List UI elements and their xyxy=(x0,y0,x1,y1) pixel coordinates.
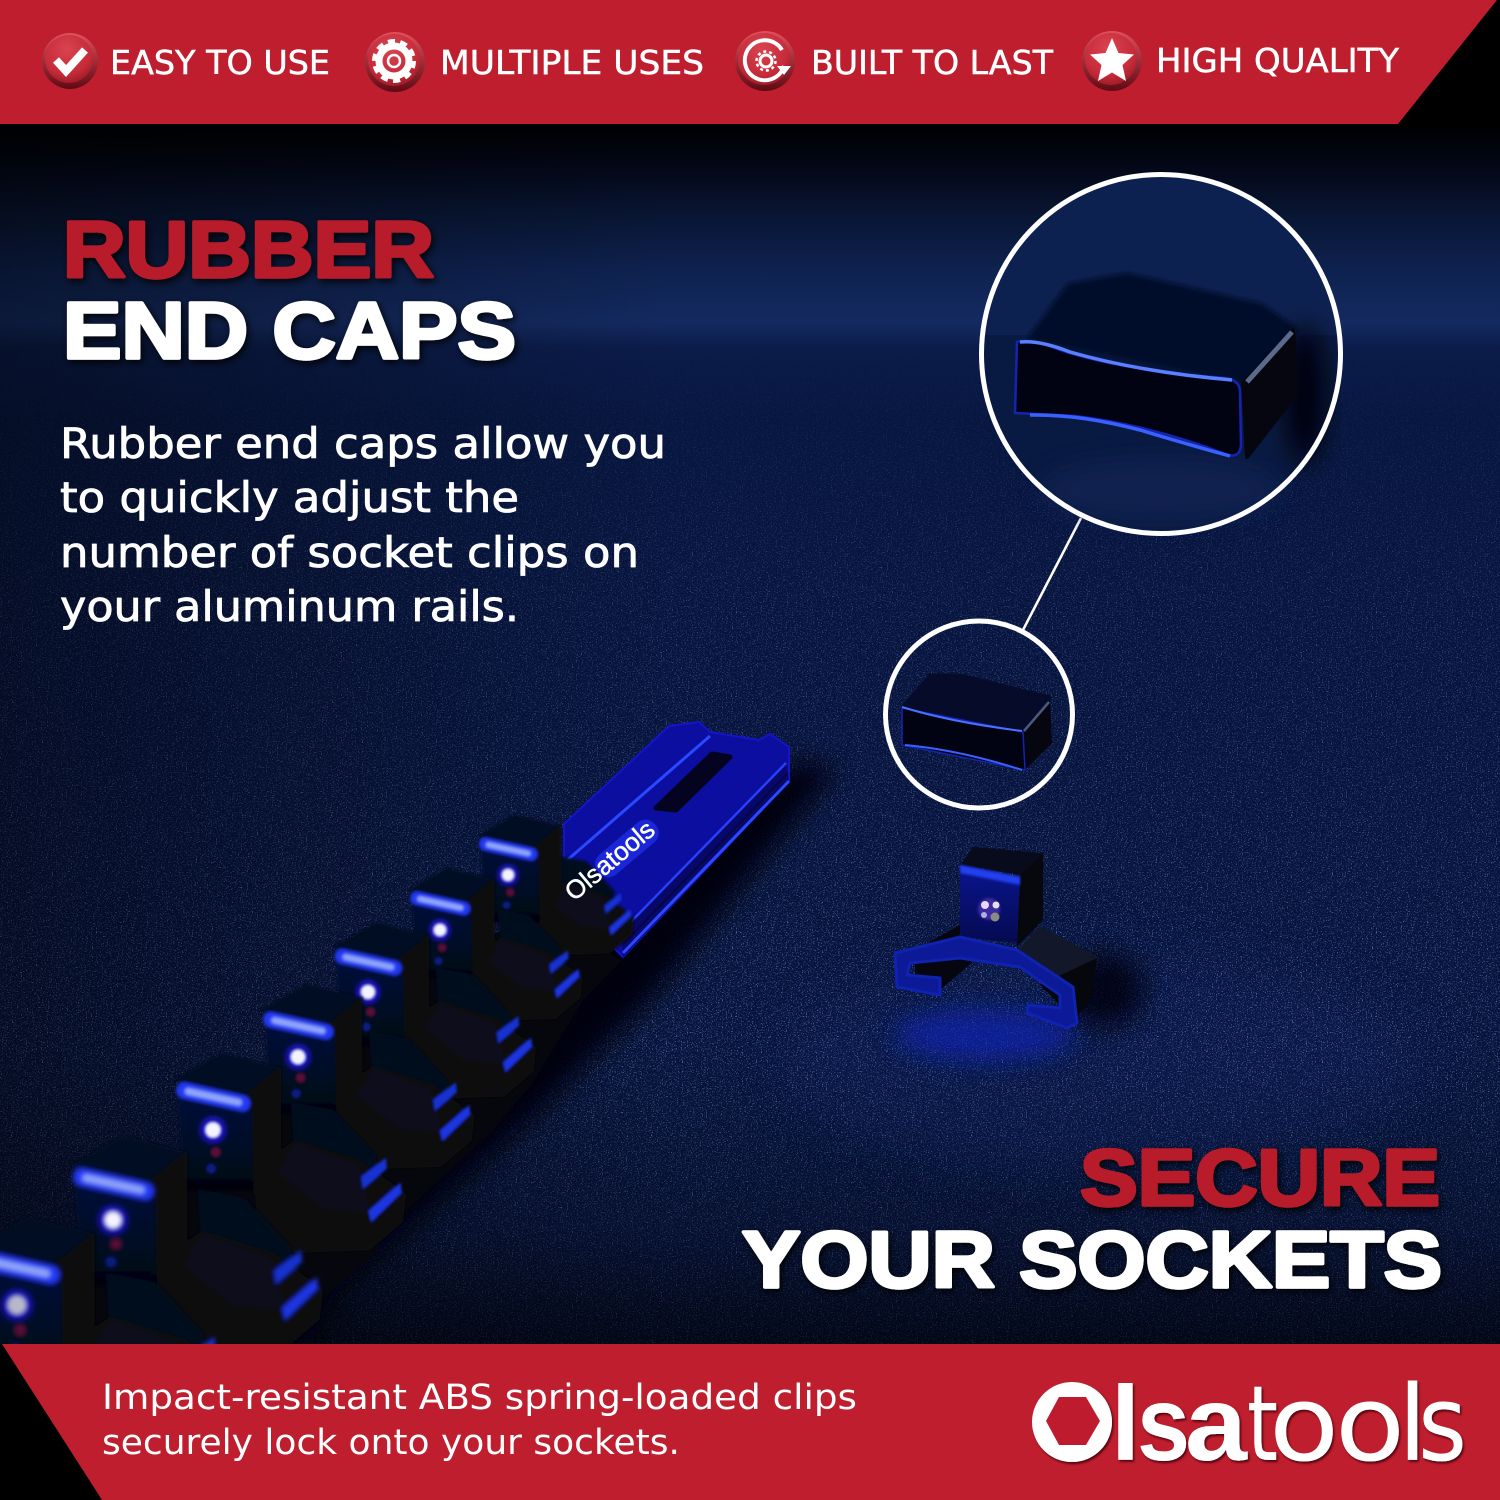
icon: star xyxy=(1082,31,1142,91)
heading: rubber end caps: END CAPS xyxy=(63,286,516,375)
logo: Olsatools: s xyxy=(1137,1365,1190,1483)
clip 3 xyxy=(332,921,534,1074)
single socket clip xyxy=(895,847,1145,1061)
footer text: securely lock onto your sockets. xyxy=(102,1423,680,1463)
icon: gear xyxy=(365,32,425,92)
clip 5 xyxy=(173,1053,403,1251)
rail slot xyxy=(656,754,730,810)
logo: Olsatools: t xyxy=(1247,1363,1278,1485)
icon: check mark xyxy=(42,33,98,89)
bottom banner xyxy=(2,1344,1500,1500)
feature label: built to last: BUILT TO LAST xyxy=(811,43,1054,82)
body text: rubber end caps description: to quickly adjust the xyxy=(60,473,519,522)
logo: Olsatools: a xyxy=(1185,1365,1248,1483)
callout line xyxy=(1023,518,1081,630)
body text: rubber end caps description: number of socket clips on xyxy=(60,528,639,577)
top banner xyxy=(0,0,1497,124)
rail product photo xyxy=(0,721,844,1344)
clip 1 xyxy=(477,815,632,954)
heading: secure your sockets: SECURE xyxy=(1080,1133,1440,1222)
rail shadow xyxy=(297,746,844,1344)
logo: Olsatools xyxy=(1032,1363,1467,1485)
logo: Olsatools: o xyxy=(1335,1363,1405,1485)
clip 2 xyxy=(408,866,582,1000)
body text: rubber end caps description: Rubber end caps allow you xyxy=(60,419,666,468)
body text: rubber end caps description xyxy=(60,419,666,631)
aluminum rail xyxy=(564,722,789,957)
clip 4 xyxy=(260,983,473,1144)
feature label: high quality: HIGH QUALITY xyxy=(1156,41,1400,80)
logo: Olsatools: s xyxy=(1418,1363,1467,1485)
heading: secure your sockets xyxy=(742,1133,1442,1304)
heading: rubber end caps xyxy=(63,205,516,375)
logo: Olsatools: l xyxy=(1111,1365,1140,1483)
heading: secure your sockets: YOUR SOCKETS xyxy=(742,1215,1442,1304)
small circle: end cap on fabric xyxy=(886,621,1072,808)
footer text xyxy=(102,1378,857,1463)
logo: Olsatools: O xyxy=(1032,1367,1112,1483)
rail logo: Olsatools xyxy=(559,814,661,907)
feature label: multiple uses: MULTIPLE USES xyxy=(440,43,704,82)
magnified circle: end cap close-up xyxy=(981,174,1341,534)
body text: rubber end caps description: your aluminum rails. xyxy=(60,582,519,631)
logo: Olsatools: l xyxy=(1398,1363,1427,1485)
footer text: Impact-resistant ABS spring-loaded clips xyxy=(102,1378,857,1418)
heading: rubber end caps: RUBBER xyxy=(63,205,434,294)
logo: Olsatools: o xyxy=(1269,1363,1339,1485)
feature label: easy to use: EASY TO USE xyxy=(110,43,330,82)
clips dark base xyxy=(94,931,505,1306)
clip 7 xyxy=(0,1216,218,1344)
clip 6 xyxy=(70,1136,320,1352)
icon: circular arrow gear xyxy=(735,31,795,91)
